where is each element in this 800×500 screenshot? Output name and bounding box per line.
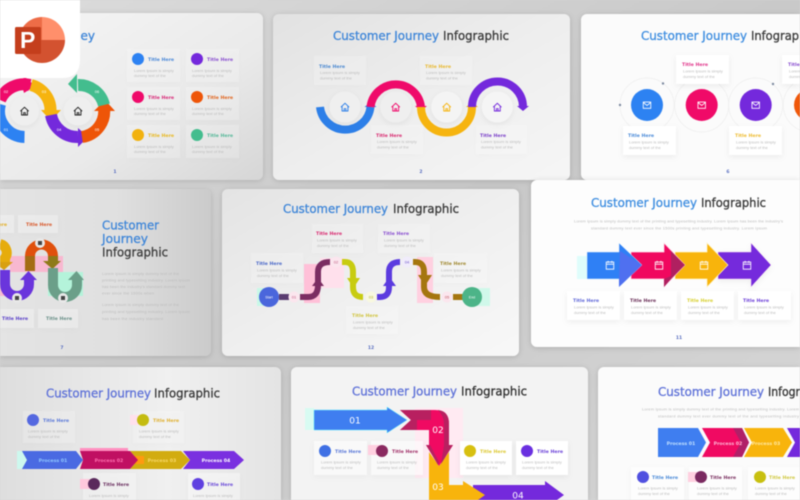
chevron 4: Process 04: [202, 458, 231, 464]
text block: ever since the 1500s when: [102, 290, 154, 296]
page number: 6: [726, 169, 730, 175]
card: orange: [186, 87, 239, 120]
card: orange: Lorem Ipsum is simply: [192, 106, 232, 111]
card: blue: Lorem Ipsum is simply: [320, 70, 360, 75]
text block: printing and typesetting industry. Lorem Ipsum: [102, 278, 191, 282]
step numbers: 06: [95, 89, 100, 94]
card: green: Lorem Ipsum is simply: [192, 144, 232, 149]
card: purple: Lorem Ipsum is simply: [522, 460, 562, 464]
icon: left hub: [10, 96, 39, 126]
card: plum: dummy text of the: [697, 491, 730, 496]
heading: slide 6 title: [641, 29, 799, 43]
card: yellow: [127, 125, 180, 158]
card: lime: Lorem Ipsum is simply: [466, 460, 506, 464]
text block: printing and typesetting industry. Lorem Ipsum: [102, 309, 191, 314]
text block: [102, 271, 191, 321]
panel: slide 6 circles: [581, 14, 800, 180]
card: purple: Title Here: [537, 449, 563, 455]
chevron 4: [183, 451, 244, 469]
card: lime: Lorem Ipsum is simply: [688, 304, 728, 310]
card: blue: Lorem Ipsum is simply: [28, 428, 68, 434]
card: plum: Lorem Ipsum is simply: [89, 493, 129, 498]
card: pink: Lorem Ipsum is simply: [683, 68, 723, 74]
card: lime: [130, 411, 184, 443]
card: yellow: Title Here: [425, 64, 451, 70]
step node 04: 04: [405, 260, 410, 264]
step numbers: 04: [57, 127, 62, 132]
card: purple: Lorem Ipsum is simply: [744, 304, 784, 310]
text block: [642, 406, 800, 418]
arrow 01: 01: [349, 416, 361, 426]
page number: 1: [113, 169, 117, 175]
heading: slide 2 title: Infographic: [443, 29, 509, 43]
icon: purple home: [482, 92, 513, 122]
card: purple: [738, 291, 791, 320]
card: blue: Title Here: [335, 449, 361, 455]
colour overlays: [257, 257, 490, 306]
heading: slide 6 title: Infograp: [751, 29, 799, 43]
text block: [574, 218, 783, 230]
card: pink: Title Here: [316, 231, 342, 237]
card: purple: Lorem Ipsum is simply: [384, 238, 424, 242]
heading: title: Customer Journey: [352, 384, 457, 398]
card: plum: Lorem Ipsum is simply: [631, 304, 671, 310]
icon: end: [462, 287, 482, 307]
heading: slide 1 title: Journey: [49, 29, 95, 43]
icon: blue mail: [631, 89, 663, 121]
chevron 2: [80, 451, 138, 469]
chart: path segments: [279, 262, 463, 297]
card: lime: Title Here: [480, 449, 506, 455]
card: blue: [251, 253, 303, 283]
card: blue: [23, 411, 75, 443]
card: lime: dummy text of the: [139, 434, 172, 439]
step numbers: 05: [95, 127, 100, 132]
card: blue: Title Here: [573, 298, 599, 304]
card: lime: [681, 291, 734, 320]
card: blue: [623, 126, 676, 155]
card: lime: [460, 441, 512, 475]
card: pink: [127, 87, 180, 120]
heading: title: Infographic: [154, 386, 220, 400]
card: pink: Title Here: [148, 95, 174, 101]
card: yellow: dummy text of the: [426, 76, 459, 80]
card: yellow: [420, 56, 472, 85]
card: blue: Lorem Ipsum is simply: [574, 304, 614, 310]
panel: slide 1 circular arrows: [0, 13, 263, 180]
step numbers: 02: [4, 89, 9, 94]
chevron 1: Process 01: [39, 458, 67, 464]
panel: slide 11 arrows: [531, 180, 800, 347]
card: purple: dummy text of the: [384, 243, 417, 248]
page number: 7: [60, 345, 64, 351]
icon: purple mail: [740, 89, 772, 121]
card: yellow: Lorem Ipsum is simply: [426, 70, 466, 75]
chevron 1: [658, 428, 706, 457]
card: yellow: [729, 126, 782, 155]
card: lime: [748, 467, 800, 500]
card: lime: Lorem Ipsum is simply: [353, 320, 393, 324]
icon: right hub: [64, 96, 92, 126]
step numbers: 01: [4, 127, 9, 132]
card: plum: Title Here: [630, 298, 656, 304]
card: olive: [434, 253, 487, 283]
card: purple: Title Here: [2, 316, 28, 322]
card: plum: Lorem Ipsum is simply: [697, 486, 737, 490]
card: blue: dummy text of the: [629, 145, 662, 150]
chevron 3: [130, 451, 190, 469]
card: lime: Title Here: [769, 475, 795, 481]
card: purple: Title Here: [743, 298, 769, 304]
card: purple: Lorem Ipsum is simply: [192, 68, 232, 73]
card: plum: Lorem Ipsum is simply: [377, 460, 417, 464]
heading: slide 7 title: Journey: [101, 232, 148, 246]
icon: start: [259, 287, 279, 307]
icon: orange circle: [794, 92, 800, 118]
card: yellow: Title Here: [148, 133, 174, 139]
heading: slide 12 title: Infographic: [393, 202, 459, 216]
card: purple: Lorem Ipsum is simply: [193, 493, 233, 498]
top pink band: [80, 448, 128, 452]
card: yellow: dummy text of the: [134, 149, 167, 154]
card: blue: [631, 467, 684, 500]
card: plum: dummy text of the: [631, 310, 664, 315]
card: purple: [188, 473, 240, 500]
card: purple: [782, 55, 800, 84]
card: orange: dummy text of the: [192, 111, 225, 116]
overlay: cyan: [577, 256, 587, 279]
card: yellow: dummy text of the: [736, 145, 769, 150]
card: blue: Title Here: [652, 475, 678, 481]
card: purple: [476, 125, 527, 154]
card: lime: Title Here: [153, 418, 179, 424]
chart: arrow 2: [631, 243, 685, 287]
chevron 3: Process 03: [148, 458, 176, 464]
card: plum: Title Here: [392, 449, 418, 455]
panel: slide 7b chevrons: [0, 367, 281, 500]
colour overlays: [0, 256, 83, 296]
card: lime: Lorem Ipsum is simply: [139, 428, 179, 434]
heading: slide 11 title: [591, 196, 766, 210]
card: pink: dummy text of the: [134, 111, 167, 116]
icon: blue home: [330, 92, 360, 122]
card: blue: dummy text of the: [134, 73, 167, 78]
card: blue: dummy text of the: [28, 434, 61, 439]
card: blue: Title Here: [43, 418, 69, 424]
orbit dots: [619, 82, 774, 106]
card: pink: [676, 55, 729, 84]
card: purple: dummy text of the: [744, 310, 777, 315]
heading: slide 2 title: [333, 29, 509, 43]
card: pink: Lorem Ipsum is simply: [317, 238, 357, 242]
card: pink: dummy text of the: [683, 74, 716, 79]
text block: has been the industry's standard dummy text: [102, 284, 186, 289]
card: pink: dummy text of the: [317, 243, 350, 248]
card: olive: Lorem Ipsum is simply: [441, 268, 481, 272]
card: blue: [567, 291, 620, 320]
text block: Lorem Ipsum is simply dummy text of the: [102, 302, 180, 307]
step node 03: [366, 292, 376, 302]
card: pink: Title Here: [682, 62, 708, 68]
chart: arrow 1: [587, 243, 642, 287]
card: blue: dummy text of the: [638, 491, 671, 496]
card: plum: Title Here: [103, 482, 129, 488]
step node 05: 05: [445, 294, 450, 300]
arrow 04: [473, 481, 564, 500]
step node 01: [288, 292, 300, 302]
card: purple: [0, 309, 34, 328]
icon: pink home: [380, 92, 411, 122]
card: yellow: Title Here: [735, 133, 761, 139]
card: yellow: [0, 215, 14, 233]
icon: left node: [12, 293, 22, 303]
card: red: Title Here: [26, 222, 52, 228]
chart: wave arcs: [320, 82, 529, 133]
card: lime: dummy text of the: [688, 310, 721, 315]
card: blue: dummy text of the: [257, 273, 290, 278]
text block: Lorem Ipsum is simply dummy text of the: [102, 271, 180, 276]
icon: yellow home: [431, 92, 462, 122]
heading: title: [46, 386, 220, 400]
step node 04: [402, 256, 412, 268]
card: blue: Lorem Ipsum is simply: [134, 68, 174, 73]
card: blue: dummy text of the: [320, 76, 353, 80]
chevron 3: Process 03: [752, 441, 780, 447]
card: pink: Title Here: [376, 133, 402, 139]
logo badge: PowerPoint: [0, 0, 80, 78]
card: purple: [516, 441, 568, 475]
page number: 2: [419, 169, 423, 175]
card: purple: [186, 49, 239, 82]
card: blue: dummy text of the: [321, 465, 354, 470]
card: green: dummy text of the: [192, 149, 225, 154]
card: orange: Title Here: [207, 95, 233, 101]
card: pink: Lorem Ipsum is simply: [134, 106, 174, 111]
card: purple: Lorem Ipsum is simply: [481, 139, 521, 144]
heading: slide 6 title: Customer Journey: [641, 29, 747, 43]
step node 02: [330, 256, 342, 268]
card: lime: dummy text of the: [353, 325, 386, 330]
card: plum: Title Here: [710, 475, 736, 481]
card: lime: Title Here: [687, 298, 713, 304]
card: plum: [624, 291, 677, 320]
card: purple: Title Here: [207, 57, 233, 63]
step node 02: 02: [334, 260, 339, 264]
chart: serpentine arrows: [0, 244, 84, 297]
card: lime: dummy text of the: [466, 465, 499, 470]
text block: Lorem Ipsum is simply dummy text of the printing and typesetting industry. Lorem: [642, 406, 800, 412]
icon: end: End: [469, 296, 475, 300]
card: olive: Title Here: [440, 261, 466, 267]
heading: title: Infographic: [461, 384, 527, 398]
icon: PowerPoint logo: P: [20, 27, 35, 53]
heading: slide 7 title: [101, 218, 168, 260]
overlays: [305, 408, 463, 478]
chevron 2: Process 02: [714, 441, 742, 447]
card: lime: Lorem Ipsum is simply: [755, 486, 795, 490]
card: olive: dummy text of the: [441, 273, 474, 278]
step numbers: [4, 89, 100, 132]
card: blue: dummy text of the: [574, 310, 607, 315]
step numbers: 03: [42, 89, 47, 94]
card: blue: [314, 56, 366, 85]
card: green: [186, 125, 239, 158]
chevron 4: [787, 428, 800, 457]
card: purple: Title Here: [383, 231, 409, 237]
card: yellow: Lorem Ipsum is simply: [736, 140, 776, 144]
text block: standard dummy text ever since the 1500s printing and typesetting industry. Lorem Ipsum: [591, 226, 768, 230]
chart: arrow 3: [675, 243, 728, 287]
chevron 1: Process 01: [667, 441, 695, 447]
icon: right node: [58, 293, 68, 303]
heading: slide 11 title: Customer Journey: [591, 196, 697, 210]
card: lime: Title Here: [352, 313, 378, 319]
card: purple: Title: [788, 62, 800, 68]
card: plum: [688, 467, 742, 500]
heading: slide 2 title: Customer Journey: [333, 29, 439, 43]
card: plum: [368, 441, 423, 475]
card: blue: Lorem Ipsum is simply: [321, 460, 361, 464]
card: purple: dumm: [789, 74, 800, 79]
panel: slide numbered arrows: [291, 367, 588, 500]
card: purple: Title Here: [480, 133, 506, 139]
heading: slide 12 title: Customer Journey: [283, 202, 388, 216]
step node 03: 03: [369, 294, 374, 300]
chevron 1: [17, 451, 83, 469]
heading: title: [352, 384, 527, 398]
panel: slide 7 serpentine arrows: [0, 189, 211, 356]
card: blue: Title Here: [256, 261, 282, 267]
card: green: Title Here: [207, 133, 233, 139]
card: blue: Title Here: [319, 64, 345, 70]
heading: slide 11 title: Infographic: [701, 196, 766, 210]
arrow 02: [400, 410, 453, 466]
card: pink: dummy text of the: [377, 144, 410, 150]
page number: 12: [368, 345, 374, 351]
heading: title: Customer Journey: [46, 386, 151, 400]
card: purple: [378, 224, 430, 253]
icon: pink mail: [686, 89, 718, 121]
panel: slide 2 wave arcs: [273, 14, 570, 180]
card: pink: [312, 224, 363, 253]
step node 05: [442, 292, 452, 302]
card: yellow: Lorem Ipsum is simply: [134, 144, 174, 149]
card: pink: [371, 125, 423, 154]
heading: slide 7 title: Infographic: [102, 246, 168, 260]
icon: start: Start: [265, 296, 273, 300]
arrow 03: [429, 452, 485, 500]
card: teal: Title Here: [46, 316, 72, 322]
text block: has been the industry standard: [102, 316, 163, 321]
chart: circular arrow ring: [0, 74, 115, 147]
card: plum: dummy text of the: [377, 465, 410, 470]
card: pink: Lorem Ipsum is simply: [377, 139, 417, 144]
card: blue: [314, 441, 367, 475]
chevron 2: Process 02: [95, 458, 123, 464]
card: blue: Lorem Ipsum is simply: [257, 268, 297, 272]
card: blue: Lorem Ipsum is simply: [629, 140, 669, 144]
card: lime: [346, 306, 398, 334]
card: purple: dummy text of the: [481, 144, 514, 150]
card: purple: dummy text of the: [192, 73, 225, 78]
card: purple: Title Here: [207, 482, 233, 488]
card: blue: [127, 49, 180, 82]
text block: standard dummy text ever dummy text of the and typesetting industry: [658, 414, 799, 418]
page number: 11: [676, 335, 682, 341]
arrow 01: [314, 407, 407, 433]
panel: slide process chevrons: [598, 367, 800, 500]
card: blue: Lorem Ipsum is simply: [638, 486, 678, 490]
heading: title: Customer Journey: [658, 385, 764, 399]
heading: slide 12 title: [283, 202, 459, 216]
card: purple: dummy text of the: [522, 465, 555, 470]
panel: slide 12 path: [222, 189, 519, 356]
chevron 2: [702, 428, 749, 457]
arrow 03: 03: [432, 483, 444, 493]
card: plum: [80, 473, 136, 500]
chevron 3: [744, 428, 792, 457]
chart: arrow 4: [718, 243, 771, 287]
card: blue: Title Here: [628, 133, 654, 139]
icon: top node: [35, 238, 45, 248]
orbit rings: [620, 78, 800, 132]
step node 01: 01: [292, 294, 297, 300]
text block: Lorem Ipsum is simply dummy text of the printing and typesetting industry. Lorem Ipsum has been the industry's: [574, 218, 783, 224]
card: blue: Title Here: [148, 57, 174, 63]
arrow 02: 02: [432, 426, 444, 436]
heading: slide 7 title: Customer: [102, 218, 159, 232]
card: teal: [38, 309, 78, 328]
card: lime: dummy text of the: [755, 491, 788, 496]
card: red: [18, 215, 58, 233]
